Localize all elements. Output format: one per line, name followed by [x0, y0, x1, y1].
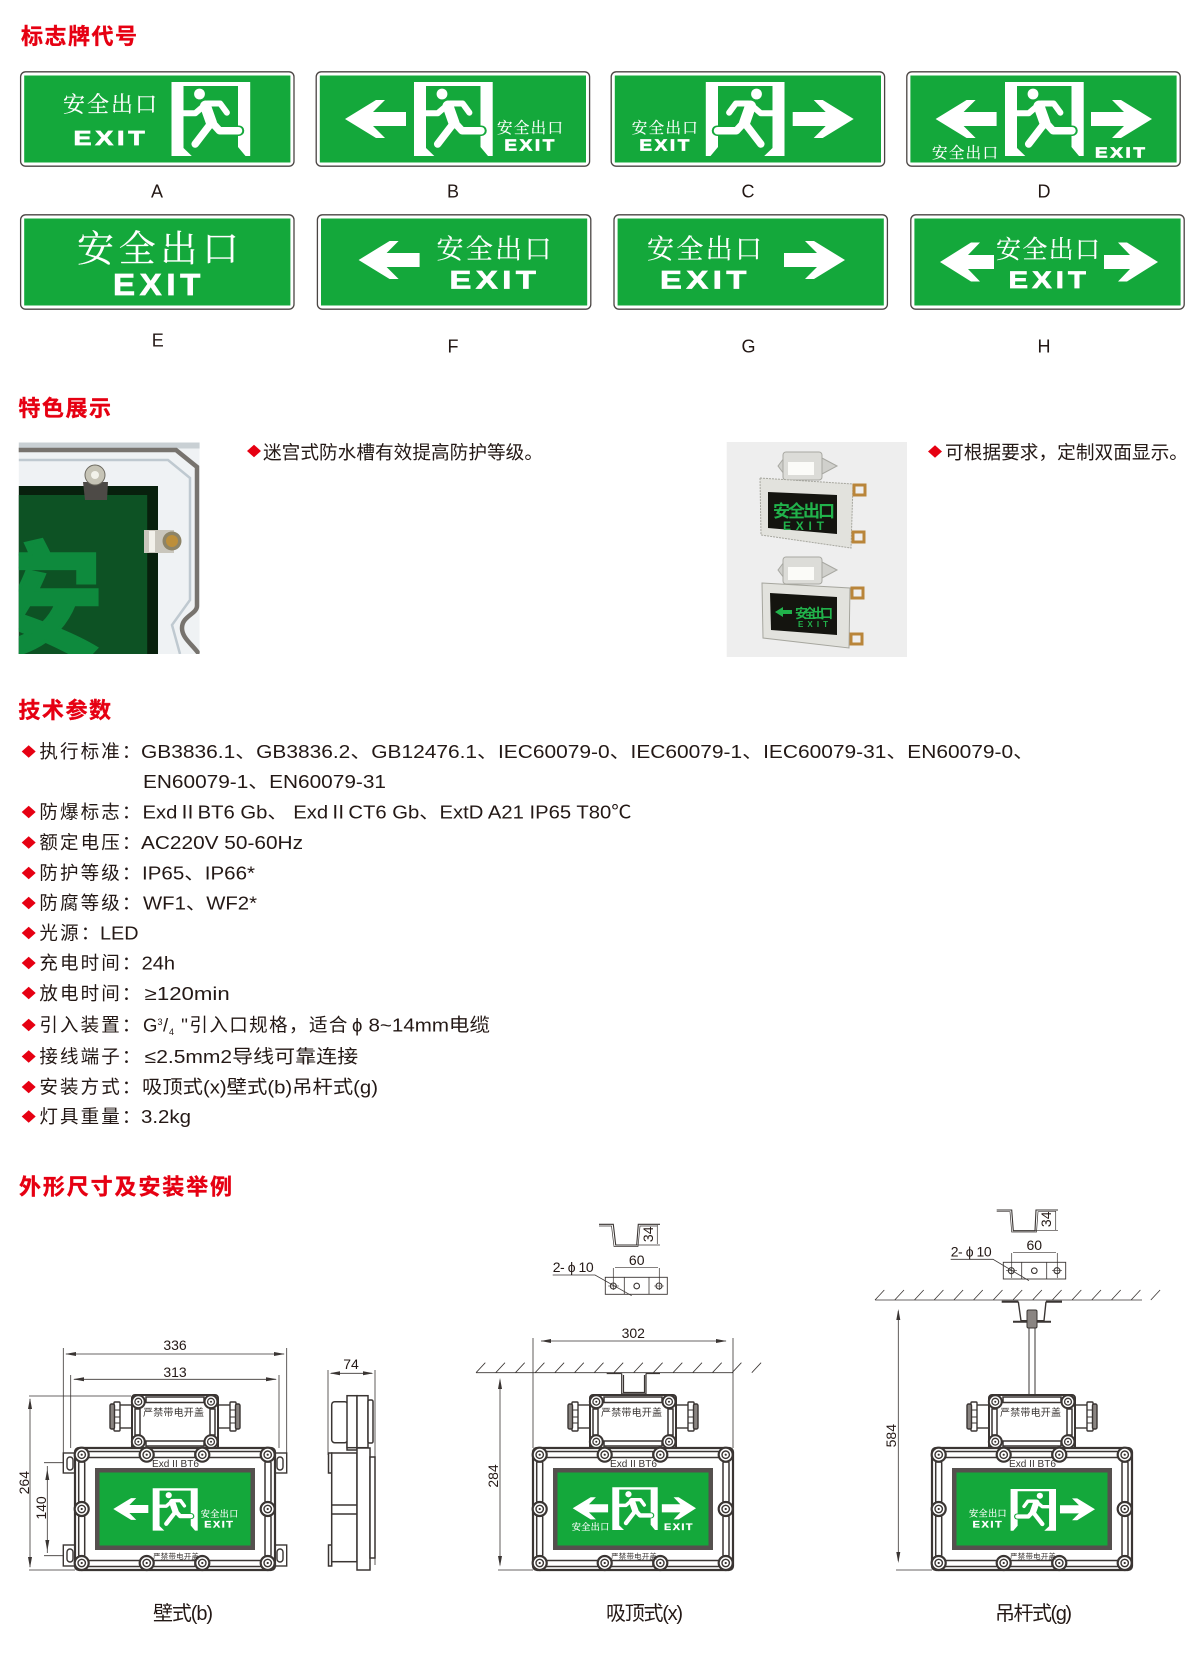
lamp texts: 严禁带电开盖 — [611, 1551, 657, 1561]
dimension 336: 336 — [163, 1337, 187, 1353]
spec: discharge time: ≥120min — [145, 983, 230, 1004]
spec: standards — [22, 741, 1034, 792]
panel: sign codes — [21, 24, 1184, 356]
spec: cable entry: / — [163, 1014, 169, 1036]
lamp texts: 严禁带电开盖 — [601, 1406, 662, 1419]
arrowheads — [896, 1309, 900, 1563]
spec: explosion-proof mark: 防爆标志： — [39, 802, 140, 822]
dimension 140: 140 — [33, 1496, 49, 1520]
sign graphic — [969, 1489, 1095, 1531]
sign G: EXIT — [660, 267, 751, 295]
bracket detail — [951, 1210, 1066, 1281]
spec: anti-corrosion level — [22, 892, 257, 914]
spec: charging time — [22, 952, 175, 974]
spec: cable entry: G — [143, 1014, 157, 1036]
caption: wall mounted: 壁式(b) — [153, 1602, 213, 1625]
sign graphic: 安全出口 — [572, 1519, 609, 1533]
spec: standards: EN60079-1、EN60079-31 — [143, 771, 386, 792]
caption: pendant mounted: 吊杆式(g) — [995, 1602, 1072, 1625]
spec: cable entry — [22, 1014, 490, 1037]
dimension lines — [896, 1311, 932, 1570]
mounting bracket and rod — [1002, 1302, 1062, 1396]
sign G — [614, 215, 887, 309]
photo: double-sided lamps — [727, 442, 907, 657]
sign graphic: 安全出口 — [969, 1506, 1007, 1520]
ceiling hatch — [476, 1363, 761, 1373]
lamp body — [932, 1395, 1132, 1570]
spec: cable entry: 引入口规格，适合 — [189, 1014, 347, 1036]
spec: discharge time: 放电时间： — [39, 983, 140, 1004]
sign F: EXIT — [450, 267, 540, 295]
sign A: 安全出口 — [63, 88, 157, 119]
lamp texts — [1000, 1406, 1061, 1561]
sign B — [316, 72, 590, 166]
sign C: 安全出口 — [632, 116, 698, 138]
sign D: EXIT — [1095, 144, 1148, 162]
spec: standards: GB3836.1、GB3836.2、GB12476.1、IEC60079-0、IEC60079-1、IEC60079-31、EN60079-0、 — [141, 741, 1034, 762]
hole callout: 2- ϕ 10 — [951, 1244, 992, 1260]
sign E — [21, 215, 294, 309]
sign D — [907, 72, 1180, 166]
sign E: 安全出口 — [77, 218, 239, 272]
lamp texts: 严禁带电开盖 — [153, 1551, 199, 1561]
lamp texts: 严禁带电开盖 — [143, 1406, 204, 1419]
spec: light source: 光源： — [39, 922, 99, 944]
dimension 34: 34 — [1038, 1211, 1054, 1227]
label D: D — [1038, 182, 1050, 202]
spec: discharge time — [22, 983, 230, 1004]
heading: features: 特色展示 — [18, 396, 111, 421]
spec: standards: 执行标准： — [39, 741, 140, 762]
sign graphic — [113, 1488, 238, 1531]
drawing: pendant mounted — [875, 1210, 1160, 1570]
dimension 584: 584 — [883, 1424, 899, 1447]
sign F — [317, 215, 591, 309]
sign graphic: EXIT — [973, 1519, 1003, 1529]
sign H — [911, 215, 1184, 309]
dimension lines — [498, 1338, 733, 1570]
spec: mounting: 安装方式： — [39, 1076, 140, 1098]
drawing: wall mounted — [16, 1337, 287, 1570]
drawing: ceiling mounted — [476, 1224, 761, 1570]
spec: charging time: 充电时间： — [39, 952, 140, 974]
upper lamp — [760, 452, 865, 548]
dimension 34: 34 — [640, 1226, 656, 1242]
sign E: EXIT — [113, 267, 205, 302]
sign graphic: EXIT — [664, 1522, 694, 1532]
panel: dimensions and installation — [16, 1174, 1160, 1625]
label E: E — [152, 330, 164, 350]
lamp texts: Exd II BT6 — [152, 1459, 199, 1470]
heading: technical parameters: 技术参数 — [18, 698, 111, 723]
spec: protection level — [22, 862, 255, 884]
spec: weight: 灯具重量： — [39, 1106, 140, 1127]
upper lamp: 安全出口 — [773, 497, 835, 522]
heading: dimensions and installation: 外形尺寸及安装举例 — [19, 1174, 232, 1200]
spec: anti-corrosion level: 防腐等级： — [39, 892, 140, 914]
sign graphic — [572, 1487, 696, 1533]
spec: terminals — [22, 1046, 358, 1067]
dimension 284: 284 — [485, 1464, 501, 1488]
label F: F — [448, 336, 458, 356]
sign G: 安全出口 — [647, 228, 762, 266]
spec: protection level: 防护等级： — [39, 862, 140, 884]
sign C: EXIT — [639, 138, 692, 155]
lower lamp: 安全出口 — [795, 603, 833, 622]
sign A — [21, 72, 294, 166]
sign B: EXIT — [504, 138, 557, 155]
panel: features — [18, 396, 1176, 657]
drawing: side view — [328, 1356, 375, 1570]
sign C — [611, 72, 885, 166]
spec: cable entry: '' — [181, 1014, 188, 1036]
label B: B — [447, 182, 459, 202]
lamp texts: 严禁带电开盖 — [1010, 1551, 1056, 1561]
lower lamp — [762, 557, 863, 648]
lower lamp: EXIT — [798, 620, 828, 629]
dimension 74: 74 — [343, 1356, 359, 1372]
spec: cable entry: ϕ — [352, 1014, 362, 1036]
spec: cable entry: 4 — [169, 1027, 174, 1037]
caption: ceiling mounted: 吸顶式(x) — [606, 1602, 683, 1625]
dimension 302: 302 — [622, 1325, 645, 1341]
dimension 313: 313 — [163, 1364, 187, 1380]
dimension 60: 60 — [1027, 1237, 1042, 1253]
spec: terminals: 接线端子： — [39, 1046, 140, 1067]
sign D: 安全出口 — [932, 141, 998, 163]
spec: rated voltage: 额定电压： — [39, 832, 140, 853]
spec: anti-corrosion level: WF1、WF2* — [143, 892, 257, 914]
label H: H — [1038, 336, 1050, 356]
mounting bracket — [607, 1374, 660, 1394]
bracket detail — [553, 1224, 667, 1296]
arrowheads — [28, 1352, 285, 1568]
sign B: 安全出口 — [497, 116, 563, 138]
spec: rated voltage — [22, 832, 303, 853]
spec: protection level: IP65、IP66* — [142, 862, 255, 884]
spec: weight: 3.2kg — [141, 1106, 191, 1127]
feature text: double-sided display: 可根据要求，定制双面显示。 — [945, 442, 1188, 463]
dimension 264: 264 — [16, 1471, 32, 1494]
spec: explosion-proof mark: ExdⅡBT6 Gb、 ExdⅡCT6 Gb、ExtD A21 IP65 T80℃ — [142, 802, 632, 822]
ceiling hatch — [875, 1290, 1160, 1300]
lamp body — [533, 1395, 733, 1570]
spec: mounting — [22, 1076, 378, 1098]
lamp texts — [143, 1406, 204, 1561]
sign H: EXIT — [1008, 267, 1090, 294]
upper lamp: EXIT — [783, 519, 825, 533]
spec: charging time: 24h — [142, 952, 175, 974]
spec: light source — [22, 922, 139, 944]
panel: technical parameters — [18, 698, 1034, 1127]
sign H: 安全出口 — [996, 230, 1100, 266]
sign F: 安全出口 — [436, 228, 552, 266]
dimension 60: 60 — [629, 1252, 645, 1268]
spec: terminals: ≤2.5mm2导线可靠连接 — [145, 1046, 358, 1067]
spec: cable entry: 8~14mm电缆 — [368, 1014, 490, 1036]
heading: sign codes: 标志牌代号 — [21, 24, 137, 49]
spec: rated voltage: AC220V 50-60Hz — [141, 832, 303, 853]
sign A: EXIT — [74, 128, 148, 150]
spec: cable entry: 引入装置： — [39, 1014, 140, 1036]
lamp texts: 严禁带电开盖 — [1000, 1406, 1061, 1419]
hole callout: 2- ϕ 10 — [553, 1259, 594, 1275]
feature text: waterproof groove: 迷宫式防水槽有效提高防护等级。 — [263, 442, 543, 463]
label G: G — [741, 336, 756, 356]
lamp body — [75, 1395, 275, 1570]
spec: light source: LED — [100, 922, 138, 944]
sign graphic: 安全出口 — [201, 1506, 238, 1520]
spec: weight — [22, 1106, 191, 1127]
dimension lines — [29, 1348, 287, 1570]
spec: mounting: 吸顶式(x)壁式(b)吊杆式(g) — [142, 1076, 378, 1098]
spec: cable entry: 3 — [158, 1017, 163, 1027]
arrowheads — [498, 1339, 727, 1567]
lamp texts: Exd II BT6 — [1009, 1459, 1056, 1470]
label A: A — [151, 182, 163, 202]
ears — [63, 1453, 287, 1566]
sign graphic: EXIT — [204, 1520, 234, 1530]
label C: C — [742, 182, 754, 202]
photo: waterproof groove close-up — [18, 442, 200, 654]
lamp texts: Exd II BT6 — [610, 1459, 657, 1470]
lamp texts — [601, 1406, 662, 1561]
